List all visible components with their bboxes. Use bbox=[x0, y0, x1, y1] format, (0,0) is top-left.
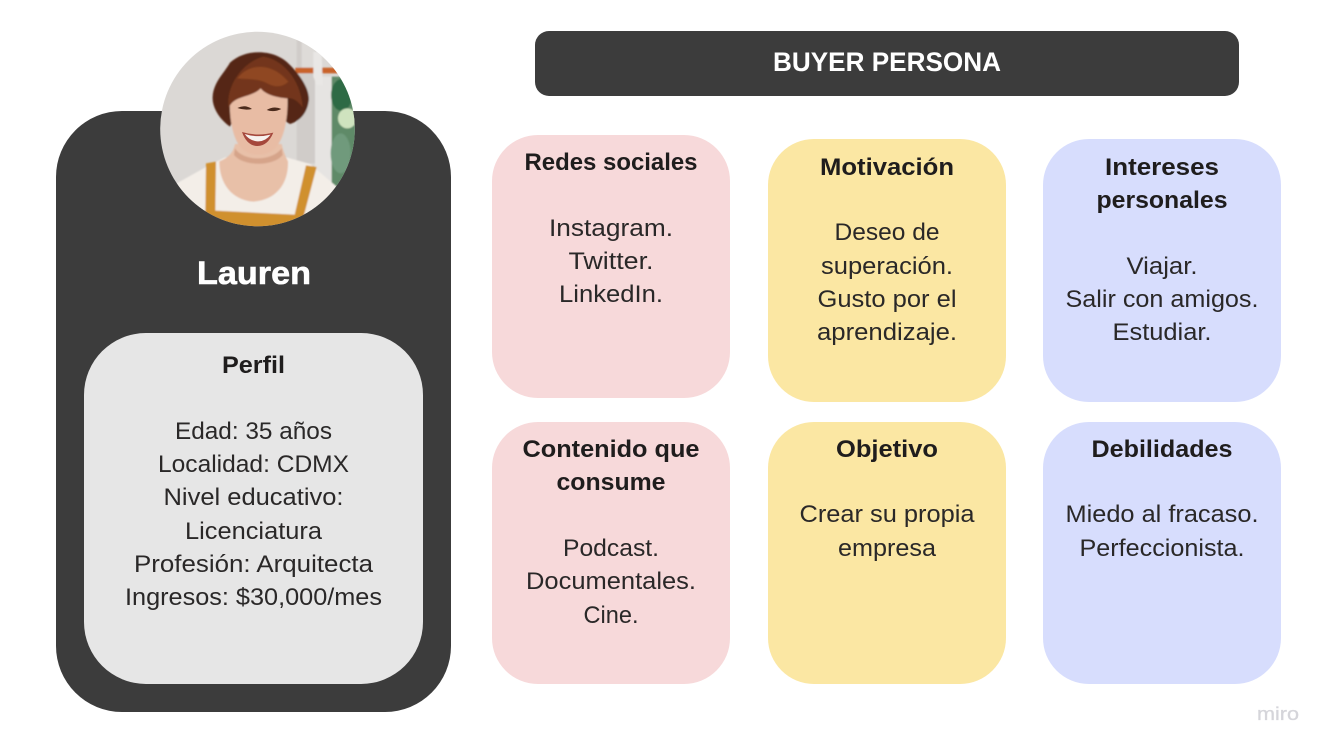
card: redes sociales: Twitter. bbox=[568, 248, 654, 275]
text: perfil details: Profesión: Arquitecta bbox=[134, 551, 374, 578]
card: redes sociales: Redes sociales bbox=[524, 149, 698, 176]
shirt bbox=[173, 157, 343, 240]
card: intereses personales: personales bbox=[1096, 187, 1228, 214]
card: debilidades bbox=[1043, 422, 1281, 684]
hair back bbox=[213, 52, 309, 127]
card: intereses personales: Intereses bbox=[1105, 154, 1219, 181]
card: contenido que consume bbox=[492, 422, 730, 684]
face bbox=[228, 88, 289, 145]
card: contenido que consume: Cine. bbox=[584, 602, 638, 629]
text: perfil details: Edad: 35 años bbox=[175, 418, 332, 445]
card: redes sociales bbox=[492, 135, 730, 398]
card: objetivo: Crear su propia bbox=[800, 501, 975, 528]
card: redes sociales: LinkedIn. bbox=[559, 281, 663, 308]
card: contenido que consume: Contenido que bbox=[522, 436, 700, 463]
panel: perfil bbox=[84, 333, 423, 684]
neck and chest bbox=[219, 144, 288, 202]
heading: perfil: Perfil bbox=[222, 352, 285, 379]
card: intereses personales: Viajar. bbox=[1126, 253, 1198, 280]
card: contenido que consume: consume bbox=[556, 469, 666, 496]
text: perfil details bbox=[125, 418, 382, 611]
card: objetivo bbox=[768, 422, 1006, 684]
card: contenido que consume: Podcast. bbox=[563, 535, 659, 562]
photo: portrait of Lauren bbox=[160, 32, 355, 226]
panel: profile card bbox=[56, 111, 451, 712]
facial features bbox=[237, 106, 281, 111]
card: motivación: Gusto por el bbox=[818, 286, 956, 313]
name: Lauren: Lauren bbox=[197, 255, 311, 291]
card: intereses personales bbox=[1043, 139, 1281, 402]
text: perfil details: Localidad: CDMX bbox=[158, 451, 349, 478]
card: debilidades: Perfeccionista. bbox=[1080, 535, 1244, 562]
card: motivación bbox=[768, 139, 1006, 402]
card: motivación: Deseo de bbox=[834, 219, 940, 246]
card: motivación: superación. bbox=[821, 253, 953, 280]
title bar: buyer persona: BUYER PERSONA bbox=[773, 47, 1001, 77]
card: objetivo: Objetivo bbox=[836, 436, 938, 463]
card: objetivo: empresa bbox=[838, 535, 937, 562]
card: redes sociales: Instagram. bbox=[549, 215, 673, 242]
text: perfil details: Nivel educativo: bbox=[164, 484, 344, 511]
card: motivación: Motivación bbox=[820, 154, 954, 181]
apron bbox=[205, 162, 317, 233]
fringe bbox=[228, 57, 303, 107]
text: perfil details: Ingresos: $30,000/mes bbox=[125, 584, 382, 611]
card: intereses personales: Estudiar. bbox=[1112, 319, 1212, 346]
card: debilidades: Miedo al fracaso. bbox=[1066, 501, 1258, 528]
card: debilidades: Debilidades bbox=[1092, 436, 1232, 463]
card: contenido que consume: Documentales. bbox=[526, 568, 696, 595]
text: perfil details: Licenciatura bbox=[185, 518, 323, 545]
title bar: buyer persona bbox=[535, 31, 1239, 96]
watermark: miro: miro bbox=[1257, 704, 1299, 724]
card: motivación: aprendizaje. bbox=[817, 319, 957, 346]
card: intereses personales: Salir con amigos. bbox=[1066, 286, 1258, 313]
